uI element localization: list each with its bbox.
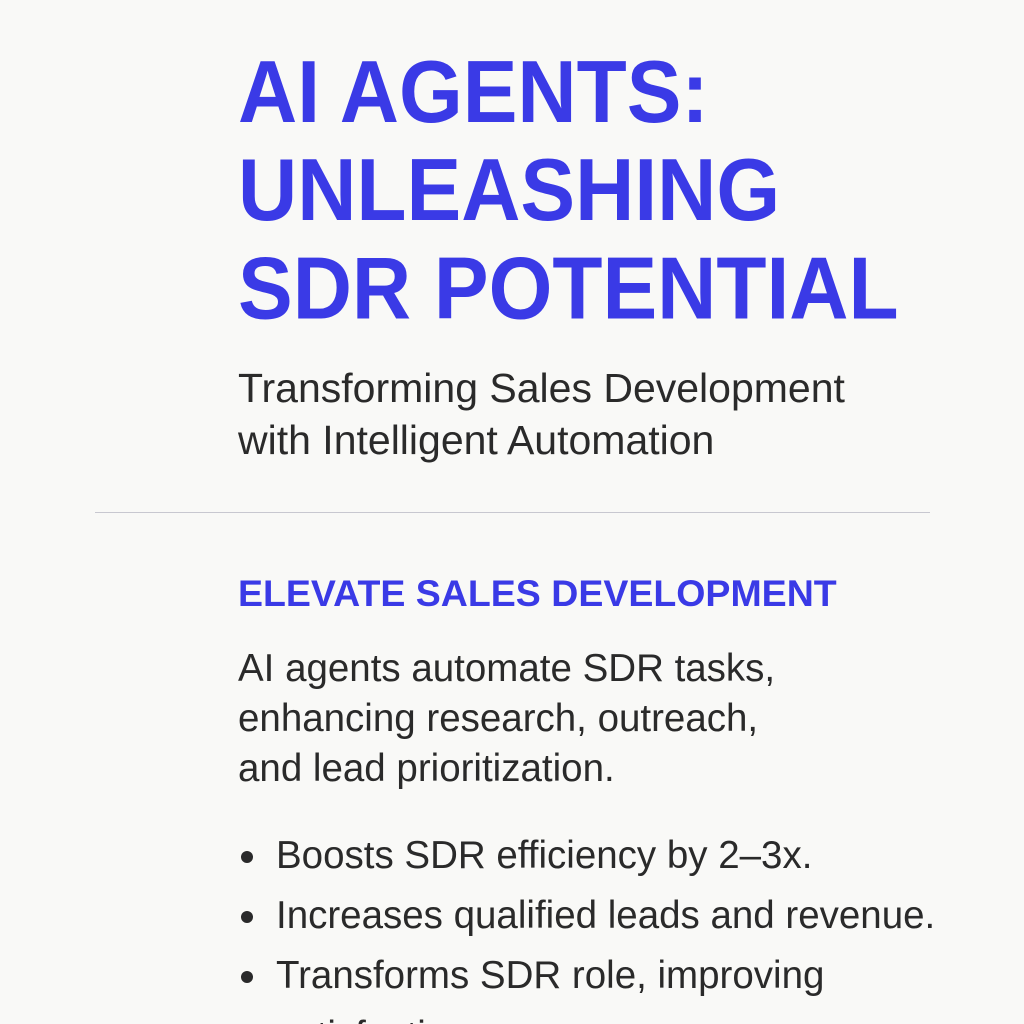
paragraph	[238, 647, 775, 790]
title	[238, 43, 899, 338]
paragraph: AI agents automate SDR tasks,	[238, 647, 775, 690]
paragraph: enhancing research, outreach,	[238, 697, 758, 740]
bullet list: Increases qualified leads and revenue.	[276, 894, 935, 937]
title: UNLEASHING	[238, 141, 780, 240]
subtitle	[238, 365, 845, 463]
subtitle: with Intelligent Automation	[238, 417, 714, 463]
paragraph: and lead prioritization.	[238, 747, 615, 790]
subtitle: Transforming Sales Development	[238, 365, 845, 411]
section heading: ELEVATE SALES DEVELOPMENT	[238, 572, 837, 614]
bullet list	[241, 834, 935, 1024]
title: AI AGENTS:	[238, 43, 709, 141]
bullet list: Boosts SDR efficiency by 2–3x.	[276, 834, 812, 877]
bullet list: Transforms SDR role, improving	[276, 954, 824, 997]
title: SDR POTENTIAL	[238, 240, 899, 338]
